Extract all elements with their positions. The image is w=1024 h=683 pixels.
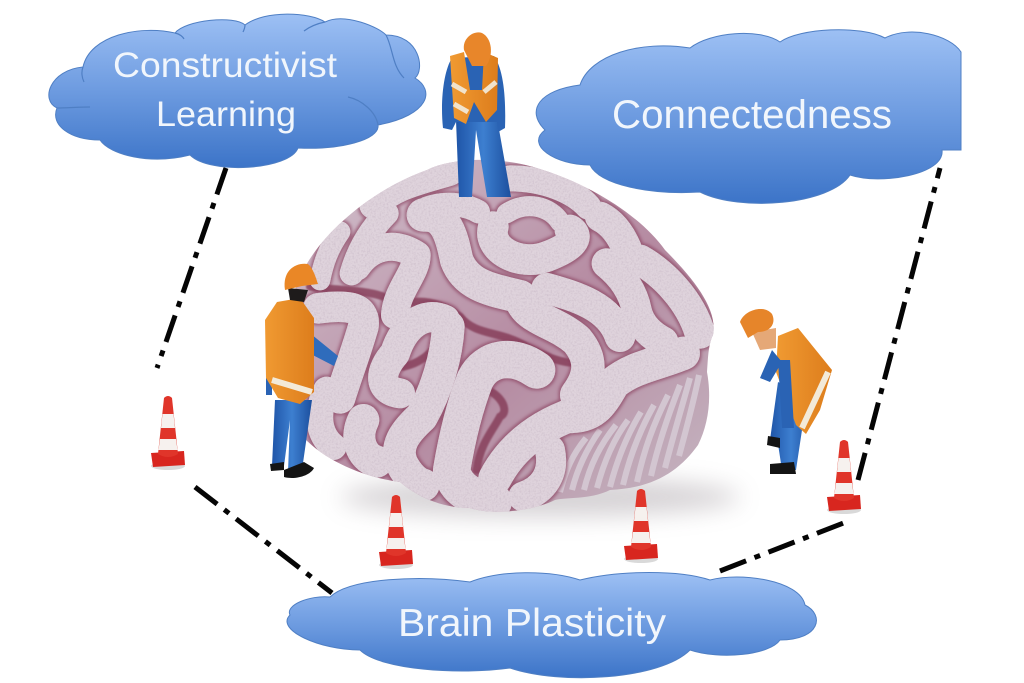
dash-dot connector: left cone to Brain Plasticity bbox=[195, 487, 332, 593]
legs bbox=[456, 118, 511, 197]
vest reflective strips bbox=[452, 82, 496, 112]
vest bbox=[265, 298, 314, 404]
legs bbox=[272, 400, 312, 472]
brain floor shadow bbox=[340, 477, 740, 517]
brain base and cerebellum bbox=[280, 160, 714, 512]
heading: Connectedness bbox=[612, 93, 892, 137]
boots bbox=[270, 462, 314, 478]
heading: Brain Plasticity bbox=[398, 602, 667, 645]
head bbox=[288, 288, 308, 302]
reaching arm bbox=[303, 330, 338, 366]
cerebellum ridges bbox=[560, 375, 699, 492]
dash-dot connector: right cone to Connectedness bbox=[858, 168, 940, 480]
worker at right bending over bbox=[740, 309, 832, 474]
traffic cone: far right bbox=[827, 440, 861, 514]
dash-dot connector: Constructivist Learning to left cone bbox=[157, 168, 226, 368]
traffic cone: bottom centre bbox=[624, 489, 658, 563]
boots bbox=[767, 436, 796, 474]
hard hat bbox=[740, 309, 773, 338]
legs bbox=[770, 382, 812, 470]
arm bbox=[760, 350, 794, 428]
heading line 2: Learning bbox=[156, 95, 296, 134]
traffic cone: far left bbox=[151, 396, 185, 470]
hard hat bbox=[464, 32, 491, 66]
face bbox=[752, 328, 776, 350]
dark folds bbox=[310, 283, 631, 490]
cloud inner arcs bbox=[57, 22, 404, 125]
torso and arms bbox=[442, 56, 505, 132]
worker at left touching brain bbox=[265, 264, 338, 478]
cloud: Brain Plasticity bbox=[287, 572, 816, 678]
dash-dot connector: Brain Plasticity to right cone bbox=[720, 522, 846, 571]
traffic cone: bottom left bbox=[379, 495, 413, 569]
far arm bbox=[266, 335, 272, 395]
vest bbox=[776, 328, 832, 434]
vest strip bbox=[272, 380, 312, 392]
worker standing on top of brain bbox=[442, 32, 511, 197]
hard hat bbox=[285, 264, 318, 290]
cloud: Connectedness bbox=[536, 30, 961, 203]
vest bbox=[450, 52, 498, 124]
brain illustration bbox=[280, 160, 714, 512]
cloud: Constructivist Learning bbox=[49, 14, 426, 168]
vest strip bbox=[802, 372, 828, 428]
gyri folds bbox=[318, 172, 700, 502]
heading line 1: Constructivist bbox=[113, 46, 337, 85]
